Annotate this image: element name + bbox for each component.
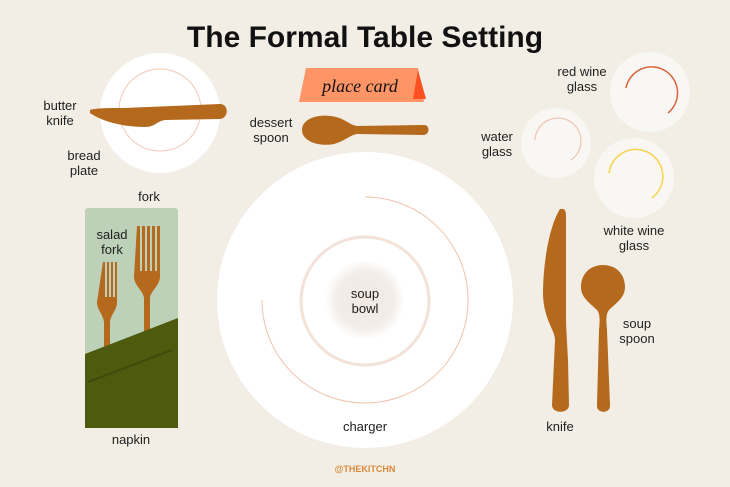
water glass (521, 108, 591, 178)
white wine glass (594, 138, 674, 218)
salad fork (97, 262, 117, 378)
label: water glass: glass (482, 144, 513, 159)
label: knife: knife (546, 419, 574, 434)
label: white wine glass: white wine (603, 223, 664, 238)
napkin (85, 208, 178, 428)
label: dessert spoon: dessert (250, 115, 293, 130)
butter knife (90, 104, 227, 127)
label: butter knife: butter (43, 98, 77, 113)
dessert spoon (302, 116, 428, 145)
label: bread plate: bread (67, 148, 101, 163)
label: napkin: napkin (112, 432, 150, 447)
place card: place card (320, 76, 399, 96)
soup bowl: soup (351, 286, 379, 301)
red wine glass (610, 52, 690, 132)
label: red wine glass: red wine (557, 64, 607, 79)
soup spoon (581, 265, 625, 412)
label: bread plate: plate (70, 163, 98, 178)
label: fork: fork (138, 189, 160, 204)
bread plate (100, 53, 220, 173)
soup bowl (301, 237, 429, 365)
label: butter knife: knife (46, 113, 74, 128)
label: salad fork: fork (101, 242, 123, 257)
label: water glass: water (480, 129, 514, 144)
label: charger: charger (343, 419, 388, 434)
label: dessert spoon: spoon (253, 130, 289, 145)
knife (543, 209, 569, 412)
soup bowl: bowl (352, 301, 378, 316)
label: soup spoon: spoon (619, 331, 655, 346)
title: The Formal Table Setting (187, 21, 543, 54)
dinner fork (134, 226, 160, 333)
label: red wine glass: glass (567, 79, 598, 94)
label: white wine glass: glass (619, 238, 650, 253)
label: salad fork: salad (96, 227, 128, 242)
place card (299, 68, 426, 102)
charger (217, 152, 513, 448)
credit: @THEKITCHN (335, 464, 395, 474)
label: soup spoon: soup (623, 316, 651, 331)
